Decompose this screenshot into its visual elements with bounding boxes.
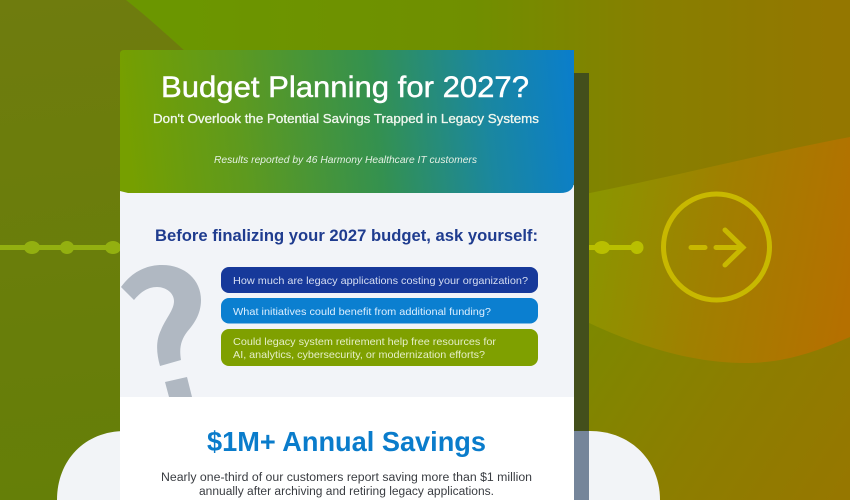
source note: Results reported by 46 Harmony Healthcare IT customers (214, 155, 477, 166)
savings description: annually after archiving and retiring legacy applications. (199, 486, 494, 498)
icon: question mark (121, 265, 201, 397)
heading: ask yourself: Before finalizing your 2027 budget, ask yourself: (155, 227, 538, 245)
question pill: costs (221, 267, 538, 293)
panel: white lower section (120, 190, 574, 500)
savings description (161, 472, 532, 498)
bottom rounded white shape (57, 431, 660, 500)
heading: annual savings: $1M+ Annual Savings (207, 426, 486, 457)
right dotted connector (589, 241, 644, 254)
heading: title: Budget Planning for 2027? (161, 71, 529, 104)
background: dark olive shape (0, 0, 186, 500)
left dotted connector (0, 241, 121, 254)
question pill: costs: How much are legacy applications costing your organization? (233, 275, 528, 287)
background: orange wave (585, 137, 850, 363)
card drop shadow (574, 73, 589, 500)
panel: infographic card (120, 50, 574, 500)
panel: header (120, 50, 574, 193)
subtitle: Don't Overlook the Potential Savings Trapped in Legacy Systems (153, 112, 539, 126)
question pill: funding (221, 298, 538, 324)
panel: questions section (120, 185, 574, 397)
question pill: retirement (221, 329, 538, 366)
savings description: Nearly one-third of our customers report saving more than $1 million (161, 472, 532, 484)
icon: arrow in circle (664, 194, 770, 300)
question pill: retirement: Could legacy system retirement help free resources for (233, 336, 497, 348)
question pill: retirement: AI, analytics, cybersecurity, or modernization efforts? (233, 349, 485, 361)
question pill: funding: What initiatives could benefit from additional funding? (233, 306, 491, 318)
